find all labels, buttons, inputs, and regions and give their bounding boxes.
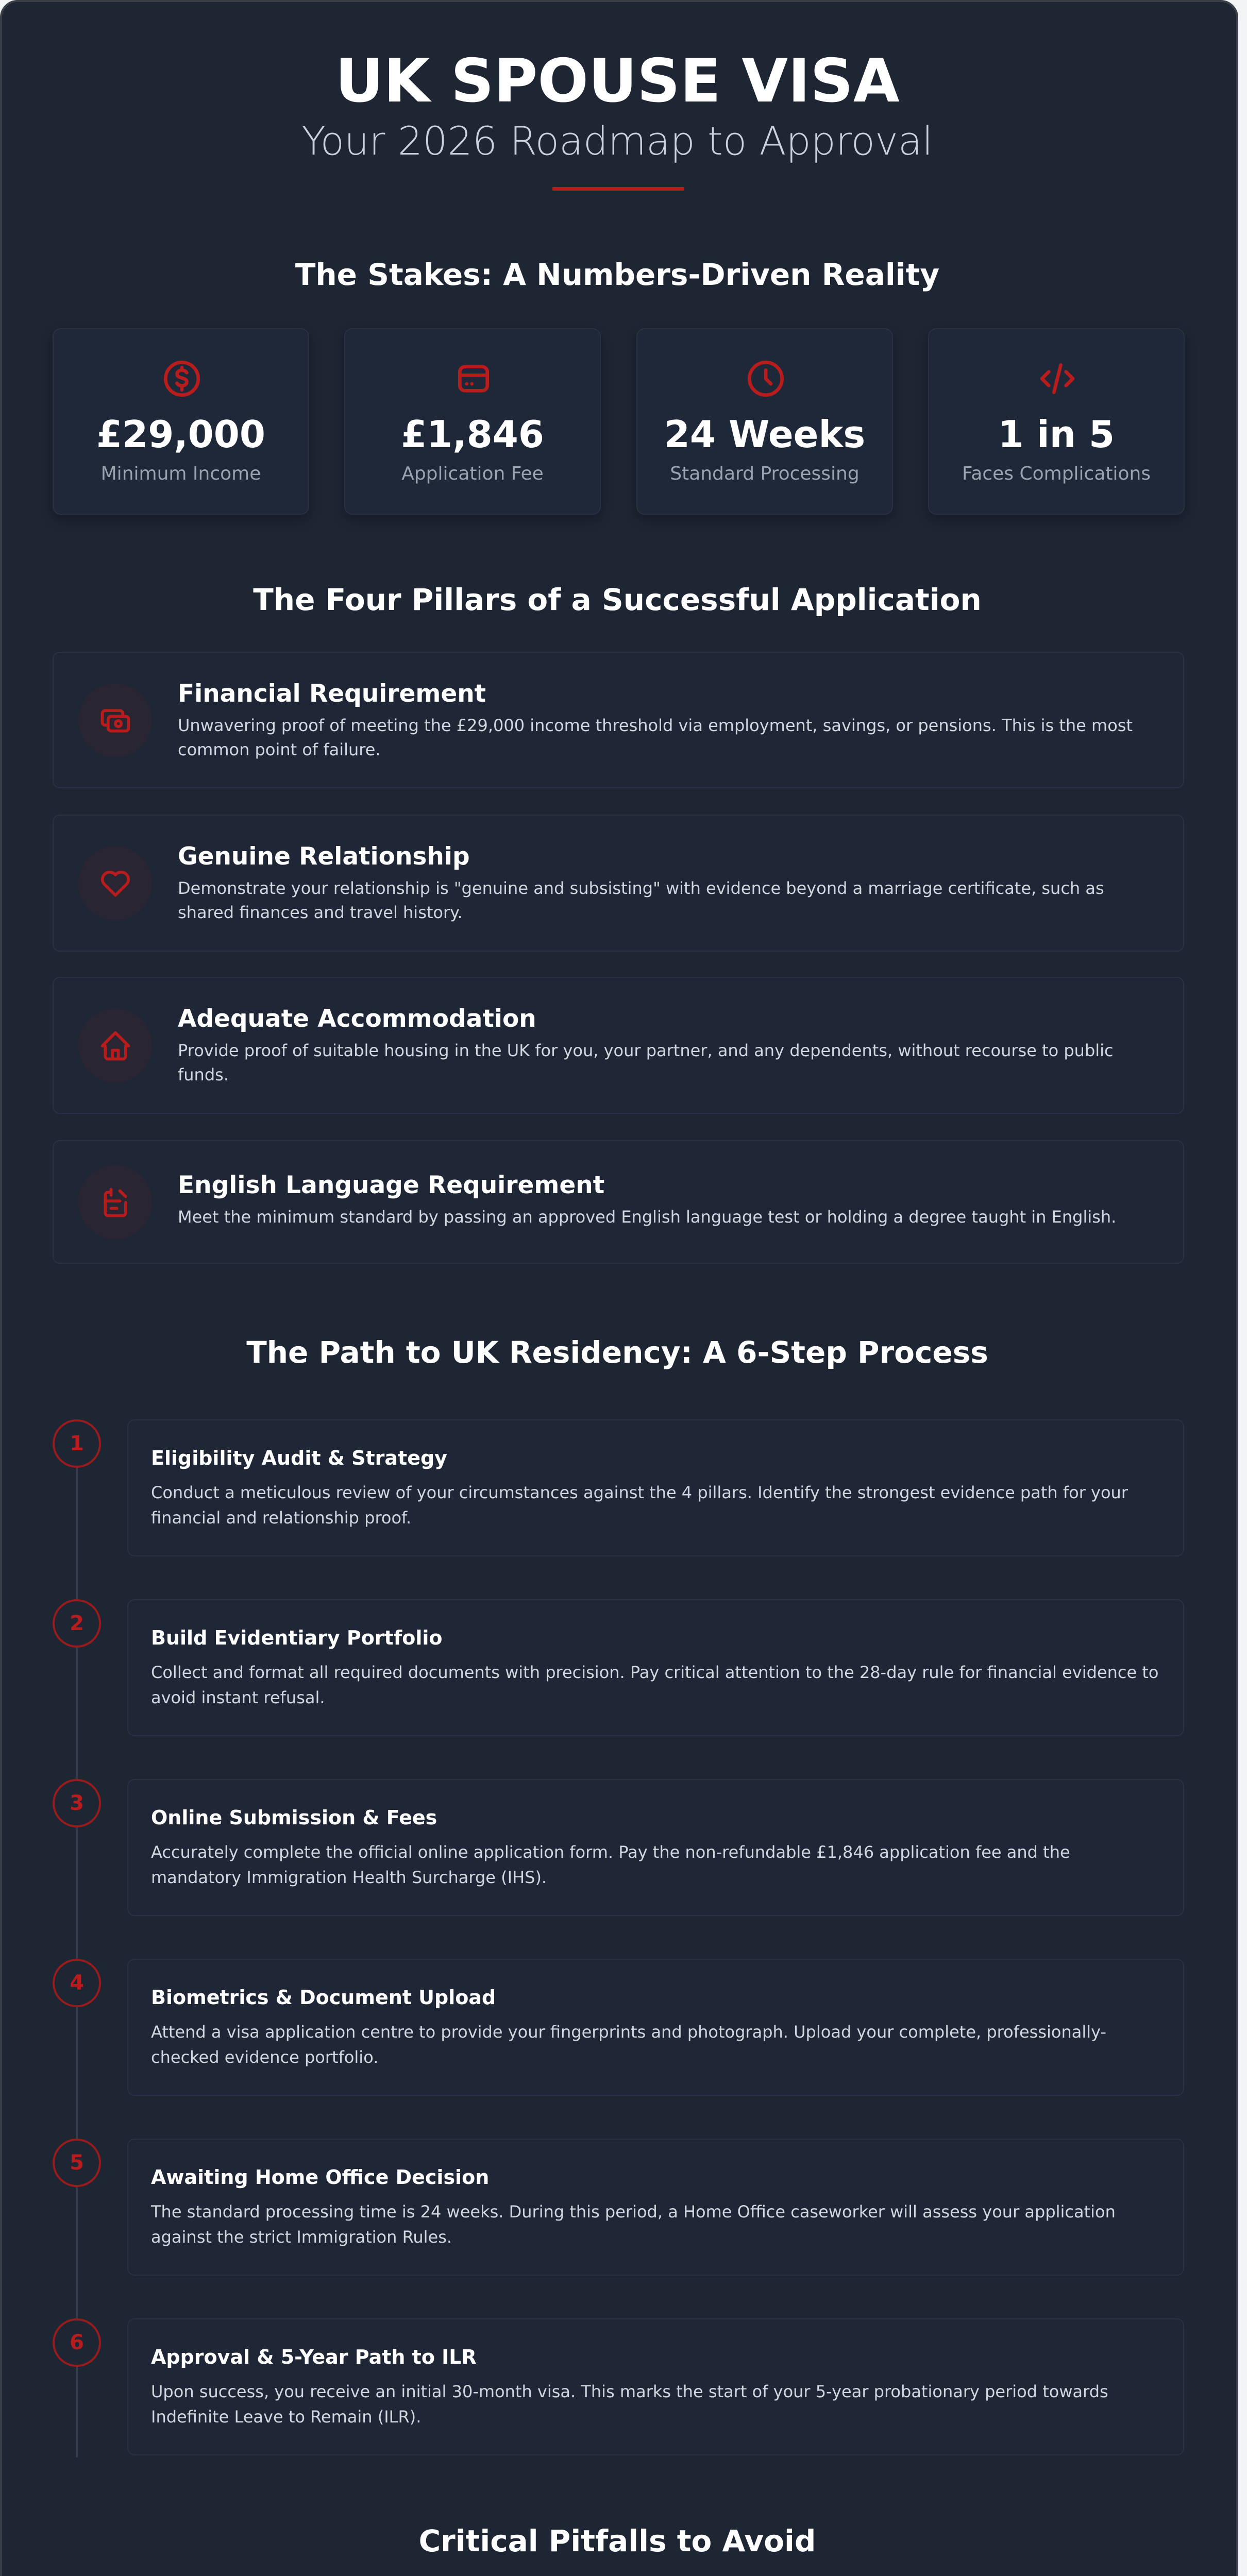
- pillar: relationship: Genuine Relationship: [178, 842, 470, 871]
- step 1 card: Eligibility Audit & Strategy: [151, 1447, 447, 1469]
- stat: minimum income: Minimum Income: [101, 463, 261, 484]
- stat: complications: Faces Complications: [962, 463, 1151, 484]
- subtitle: Your 2026 Roadmap to Approval: [301, 118, 933, 164]
- step 2 card: Build Evidentiary Portfolio: [151, 1626, 443, 1649]
- step 6: [53, 2318, 1184, 2455]
- step 5: [53, 2139, 1184, 2276]
- step 1: [53, 1419, 1184, 1556]
- step 1 card: [127, 1419, 1184, 1556]
- step 6 card: [127, 2318, 1184, 2455]
- step 1 number: 1: [70, 1432, 84, 1455]
- red accent bar: [552, 187, 684, 191]
- step 3: [53, 1779, 1184, 1916]
- step 2 card: [127, 1599, 1184, 1736]
- heading: stakes: The Stakes: A Numbers-Driven Reality: [295, 257, 939, 292]
- stat: processing: 24 Weeks: [664, 413, 865, 456]
- step 5 number: [53, 2139, 101, 2187]
- step 3 number: 3: [70, 1791, 84, 1815]
- stat: application fee: Application Fee: [401, 463, 544, 484]
- heading: pitfalls: Critical Pitfalls to Avoid: [419, 2523, 816, 2558]
- pillar: english: [53, 1140, 1184, 1264]
- pillar: accommodation: Adequate Accommodation: [178, 1005, 536, 1033]
- step 1 card: Conduct a meticulous review of your circumstances against the 4 pillars. Identify the strongest evidence path for your financial and relationship proof.: [151, 1483, 1128, 1528]
- stat: processing: [636, 328, 893, 515]
- pillar: relationship: [53, 815, 1184, 952]
- pillar: financial: Financial Requirement: [178, 680, 486, 708]
- step 4 number: [53, 1959, 101, 2007]
- step 6 number: 6: [70, 2331, 84, 2354]
- timeline line: [76, 1443, 78, 2458]
- pillar: relationship: Demonstrate your relationship is "genuine and subsisting" with evidence beyond a marriage certificate, such as shared finances and travel history.: [178, 878, 1104, 922]
- step 5 card: The standard processing time is 24 weeks. During this period, a Home Office caseworker will assess your application against the strict Immigration Rules.: [151, 2202, 1116, 2247]
- step 5 card: Awaiting Home Office Decision: [151, 2166, 489, 2189]
- step 4 number: 4: [70, 1971, 84, 1995]
- step 6 number: [53, 2318, 101, 2367]
- step 2 number: 2: [70, 1612, 84, 1635]
- step 2 card: Collect and format all required documents with precision. Pay critical attention to the 28-day rule for financial evidence to avoid instant refusal.: [151, 1663, 1158, 1707]
- pillar: english: Meet the minimum standard by passing an approved English language test or holding a degree taught in English.: [178, 1207, 1116, 1227]
- step 1 number: [53, 1419, 101, 1468]
- stat: complications: 1 in 5: [998, 413, 1115, 456]
- heading: steps: The Path to UK Residency: A 6-Step Process: [246, 1335, 988, 1370]
- step 4: [53, 1959, 1184, 2096]
- pillar: financial: [53, 652, 1184, 788]
- step 5 number: 5: [70, 2151, 84, 2175]
- stat: minimum income: £29,000: [96, 413, 265, 456]
- stat: minimum income: [53, 328, 309, 515]
- pillar: financial: Unwavering proof of meeting the £29,000 income threshold via employment, savings, or pensions. This is the most common point of failure.: [178, 716, 1133, 759]
- step 6 card: Approval & 5-Year Path to ILR: [151, 2346, 477, 2368]
- step 3 number: [53, 1779, 101, 1827]
- title: UK SPOUSE VISA: [335, 46, 900, 116]
- step 2: [53, 1599, 1184, 1736]
- pillar: accommodation: Provide proof of suitable housing in the UK for you, your partner, and any dependents, without recourse to public funds.: [178, 1041, 1114, 1084]
- step 3 card: [127, 1779, 1184, 1916]
- pillar: accommodation: [53, 977, 1184, 1114]
- step 5 card: [127, 2139, 1184, 2276]
- step 3 card: Accurately complete the official online application form. Pay the non-refundable £1,846 application fee and the mandatory Immigration Health Surcharge (IHS).: [151, 1842, 1070, 1887]
- stat: application fee: [344, 328, 601, 515]
- step 6 card: Upon success, you receive an initial 30-month visa. This marks the start of your 5-year probationary period towards Indefinite Leave to Remain (ILR).: [151, 2382, 1108, 2427]
- step 4 card: Attend a visa application centre to provide your fingerprints and photograph. Upload your complete, professionally-checked evidence portfolio.: [151, 2022, 1106, 2067]
- step 4 card: [127, 1959, 1184, 2096]
- step 3 card: Online Submission & Fees: [151, 1806, 437, 1829]
- heading: pillars: The Four Pillars of a Successful Application: [253, 582, 982, 617]
- stat: processing: Standard Processing: [670, 463, 860, 484]
- pillar: english: English Language Requirement: [178, 1171, 604, 1199]
- step 4 card: Biometrics & Document Upload: [151, 1986, 496, 2009]
- step 2 number: [53, 1599, 101, 1648]
- stat: complications: [928, 328, 1185, 515]
- stat: application fee: £1,846: [401, 413, 544, 456]
